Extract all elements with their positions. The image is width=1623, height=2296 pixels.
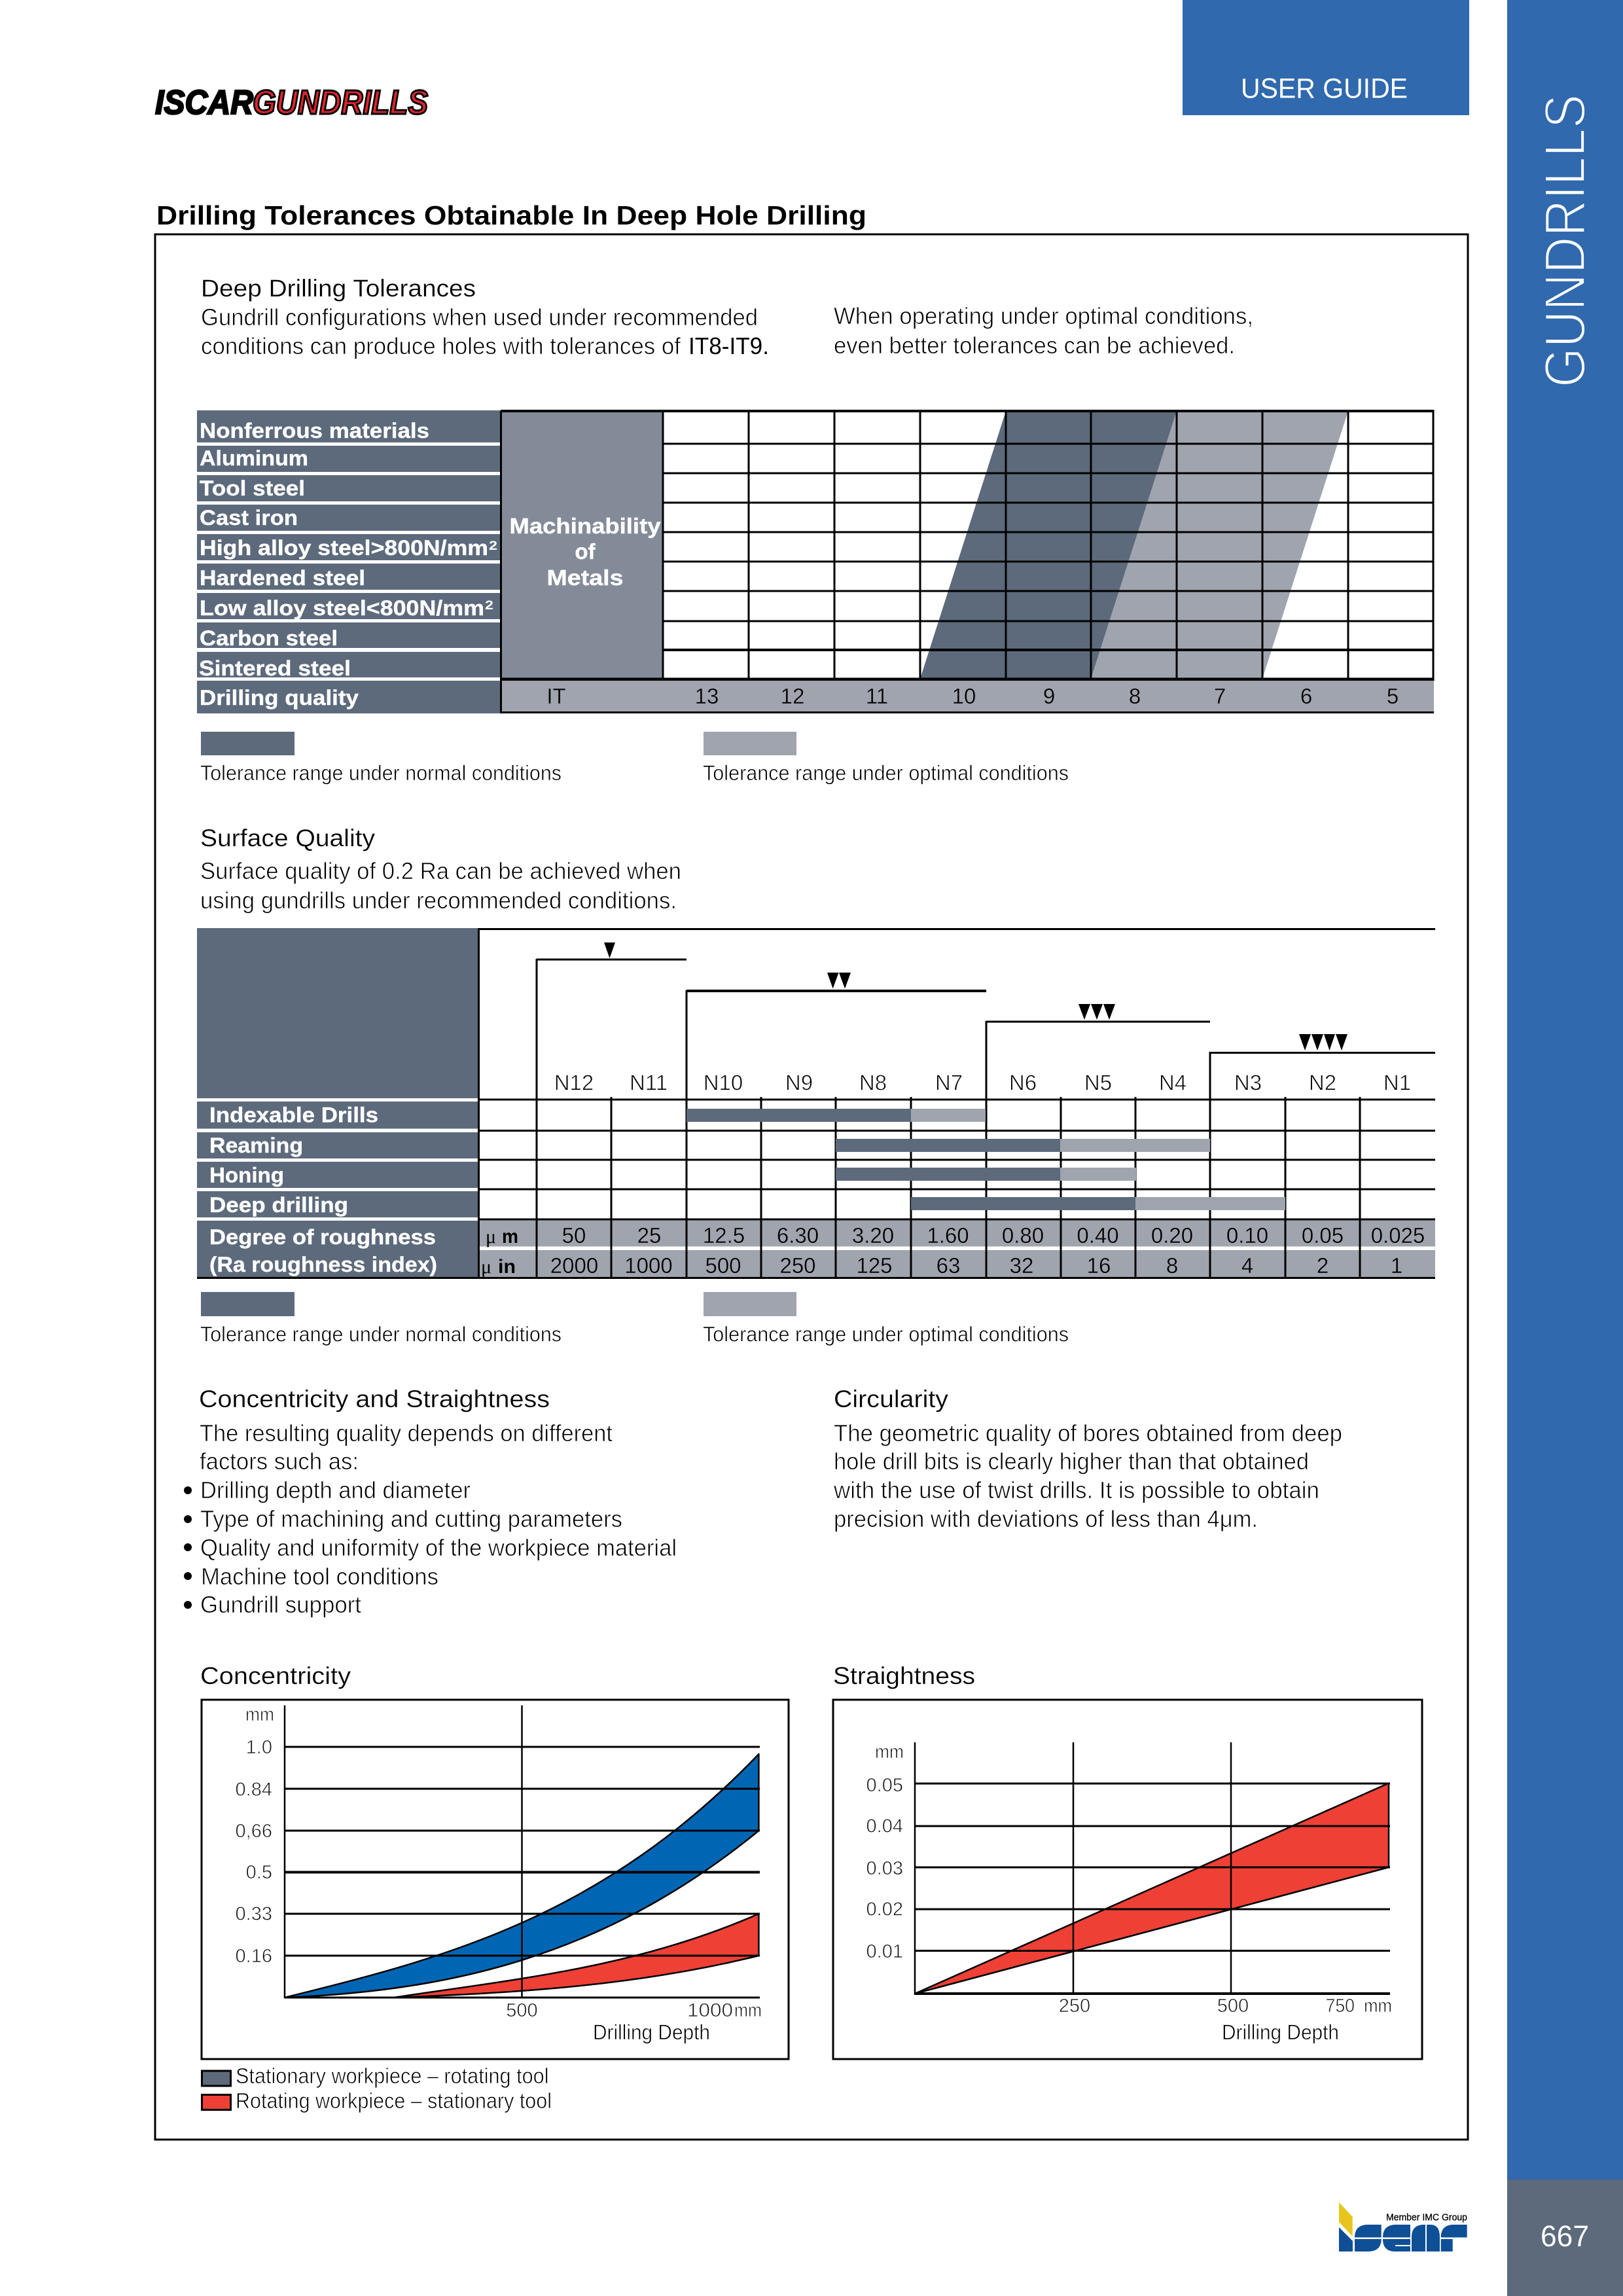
machinability panel: Metals <box>547 565 623 590</box>
roughness value bands <box>480 1220 1435 1277</box>
tolerance band: normal conditions <box>920 411 1177 679</box>
bulleted list of factors: Machine tool conditions <box>201 1563 438 1590</box>
straightness x-axis labels: Drilling Depth <box>1222 2020 1339 2044</box>
roughness grade labels: N3 <box>1234 1071 1262 1094</box>
IT grade row: 6 <box>1300 684 1312 708</box>
roughness values in microinches <box>550 1253 1402 1278</box>
section intro: deep drilling tolerances: Deep Drilling Tolerances <box>201 275 476 302</box>
section intro: surface quality: Surface Quality <box>200 825 376 852</box>
chart: concentricity <box>202 1700 789 2059</box>
IT grade row: 11 <box>866 684 888 708</box>
roughness grade labels: N4 <box>1159 1071 1186 1094</box>
concentricity x-axis labels: Drilling Depth <box>593 2020 710 2044</box>
chart: straightness <box>833 1700 1422 2059</box>
roughness values in micrometres: 0.025 <box>1371 1223 1425 1247</box>
roughness values in micrometres: 3.20 <box>852 1223 894 1247</box>
roughness values in microinches: 1000 <box>624 1253 673 1278</box>
icon: quadruple triangle surface mark <box>1299 1034 1347 1050</box>
legend: tolerance table: Tolerance range under normal conditions <box>200 761 562 785</box>
roughness values in microinches: 2 <box>1317 1253 1329 1278</box>
section intro: surface quality: using gundrills under recommended conditions. <box>200 887 677 914</box>
process label bands: (Ra roughness index) <box>209 1253 437 1276</box>
heading: straightness chart: Straightness <box>833 1662 975 1689</box>
roughness grade labels: N5 <box>1084 1071 1112 1094</box>
IT grade row: 12 <box>781 684 804 708</box>
IT grade row: IT <box>546 684 566 708</box>
icon: double triangle surface mark <box>827 973 851 988</box>
roughness grade labels: N2 <box>1309 1071 1336 1094</box>
logo: Iscar member IMC group: Member IMC Group <box>1386 2212 1467 2223</box>
concentricity y-axis labels: 0.16 <box>236 1946 272 1967</box>
header tab: user guide <box>1183 0 1469 115</box>
straightness y-axis labels: 0.04 <box>866 1816 903 1837</box>
bulleted list of factors: Drilling depth and diameter <box>200 1477 471 1503</box>
straightness x-axis labels: mm <box>1364 1996 1392 2017</box>
IT grade row: 7 <box>1214 684 1226 708</box>
table: machinability of metals by IT grade <box>197 410 1435 713</box>
page title: Drilling Tolerances Obtainable In Deep Hole Drilling <box>156 200 866 230</box>
text block: circularity: precision with deviations of less than 4μm. <box>834 1505 1258 1532</box>
roughness grade labels: N6 <box>1009 1071 1037 1094</box>
material label bands: Nonferrous materials <box>200 419 429 442</box>
straightness x-axis labels: 750 <box>1326 1996 1355 2017</box>
legend: surface quality table: Tolerance range under optimal conditions <box>703 1322 1069 1346</box>
logo: Iscar member IMC group <box>1339 2202 1467 2251</box>
material label bands: High alloy steel>800N/mm <box>200 536 488 560</box>
header tab: user guide: USER GUIDE <box>1241 73 1408 105</box>
roughness values in micrometres: 0.80 <box>1002 1223 1044 1247</box>
machinability panel <box>501 411 664 679</box>
text block: optimal conditions note: When operating under optimal conditions, <box>834 302 1253 329</box>
concentricity y-axis labels: 1.0 <box>246 1737 272 1758</box>
material label bands: Sintered steel <box>199 656 351 680</box>
straightness y-axis labels: 0.05 <box>866 1775 903 1796</box>
process label bands: Honing <box>209 1164 284 1187</box>
straightness y-axis labels <box>866 1742 904 1962</box>
roughness grade labels: N8 <box>859 1071 887 1094</box>
unit labels: μ <box>481 1256 491 1278</box>
roughness values in microinches: 8 <box>1166 1253 1178 1278</box>
text block: circularity <box>833 1386 1342 1532</box>
text block: circularity: Circularity <box>834 1386 949 1412</box>
roughness values in microinches: 63 <box>936 1253 960 1278</box>
main content frame <box>155 234 1468 2140</box>
material label bands: Hardened steel <box>200 566 365 590</box>
roughness values in micrometres: 6.30 <box>777 1223 819 1247</box>
section intro: surface quality <box>200 825 681 914</box>
unit labels: μ <box>486 1226 496 1247</box>
text block: concentricity and straightness <box>184 1386 677 1618</box>
bulleted list of factors <box>184 1477 677 1618</box>
straightness x-axis labels: 500 <box>1217 1996 1249 2017</box>
text block: optimal conditions note: even better tolerances can be achieved. <box>834 332 1235 359</box>
roughness values in micrometres: 0.05 <box>1302 1223 1344 1247</box>
concentricity y-axis labels: 0,66 <box>236 1821 272 1842</box>
IT grade row: 13 <box>695 684 719 708</box>
material label bands: Aluminum <box>200 446 308 470</box>
legend: tolerance table <box>200 732 1069 785</box>
range bars <box>687 1109 1285 1210</box>
roughness values in microinches: 250 <box>779 1253 816 1278</box>
table: surface quality by machining process <box>197 928 1435 1278</box>
roughness values in micrometres: 12.5 <box>703 1223 745 1247</box>
roughness values in micrometres: 50 <box>562 1223 586 1247</box>
concentricity y-axis labels <box>236 1704 274 1967</box>
bulleted list of factors: Type of machining and cutting parameters <box>200 1505 622 1532</box>
text block: concentricity and straightness: factors such as: <box>200 1448 359 1475</box>
roughness grade labels <box>554 1071 1411 1094</box>
band: rotating workpiece, stationary tool <box>394 1914 758 1998</box>
roughness values in micrometres: 25 <box>637 1223 661 1247</box>
text block: circularity: hole drill bits is clearly higher than that obtained <box>834 1448 1309 1475</box>
process label bands: Deep drilling <box>209 1193 348 1217</box>
logo: ISCAR GUNDRILLS: ISCAR <box>155 84 253 122</box>
unit labels: in <box>498 1256 516 1278</box>
icon: yellow insert <box>1339 2202 1353 2236</box>
roughness values in microinches: 32 <box>1010 1253 1033 1278</box>
bulleted list of factors: Quality and uniformity of the workpiece material <box>200 1534 677 1561</box>
icon: single triangle surface mark <box>604 942 615 958</box>
tolerance band: optimal conditions <box>1091 411 1348 679</box>
legend: concentricity chart <box>202 2064 552 2113</box>
material label bands: 2 <box>485 599 493 613</box>
unit labels <box>481 1226 518 1278</box>
roughness grade labels: N11 <box>630 1071 668 1094</box>
concentricity x-axis labels: 1000 <box>687 2000 733 2021</box>
band: stationary workpiece, rotating tool <box>285 1754 758 1998</box>
material label bands: Drilling quality <box>200 686 359 709</box>
roughness values in microinches: 500 <box>705 1253 741 1278</box>
IT grade row: 5 <box>1387 684 1399 708</box>
process label bands: Degree of roughness <box>209 1225 436 1249</box>
roughness values in microinches: 16 <box>1087 1253 1111 1278</box>
process label bands <box>197 1102 478 1278</box>
legend: tolerance table: Tolerance range under optimal conditions <box>703 761 1069 785</box>
text block: circularity: The geometric quality of bores obtained from deep <box>834 1420 1342 1446</box>
straightness x-axis labels: 250 <box>1059 1996 1090 2017</box>
roughness grade labels: N9 <box>785 1071 813 1094</box>
logo: ISCAR GUNDRILLS <box>155 84 428 122</box>
section intro: deep drilling tolerances <box>201 275 769 359</box>
legend: surface quality table <box>200 1292 1069 1346</box>
straightness y-axis labels: mm <box>875 1742 904 1763</box>
roughness values in micrometres: 1.60 <box>927 1223 969 1247</box>
legend: surface quality table: Tolerance range under normal conditions <box>200 1322 562 1346</box>
bulleted list of factors: Gundrill support <box>200 1591 361 1618</box>
straightness x-axis labels <box>1059 1996 1392 2044</box>
roughness values in microinches: 2000 <box>550 1253 598 1278</box>
section intro: deep drilling tolerances: conditions can produce holes with tolerances of <box>201 332 681 359</box>
material label bands <box>197 410 501 713</box>
process label bands: Reaming <box>209 1134 303 1157</box>
page number: 667 <box>1541 2219 1589 2253</box>
section intro: surface quality: Surface quality of 0.2 Ra can be achieved when <box>200 857 681 884</box>
material label bands: Carbon steel <box>200 626 338 650</box>
section intro: deep drilling tolerances: IT8-IT9. <box>688 332 769 359</box>
material label bands: Low alloy steel<800N/mm <box>200 596 484 620</box>
text block: circularity: with the use of twist drills. It is possible to obtain <box>833 1477 1319 1503</box>
concentricity y-axis labels: mm <box>245 1704 274 1725</box>
roughness grade labels: N7 <box>935 1071 963 1094</box>
process label bands: Indexable Drills <box>209 1103 378 1127</box>
roughness grade labels: N10 <box>704 1071 743 1094</box>
text block: concentricity and straightness: Concentricity and Straightness <box>199 1386 550 1412</box>
roughness values in microinches: 125 <box>856 1253 893 1278</box>
IT grade row <box>501 681 1434 713</box>
concentricity y-axis labels: 0.84 <box>236 1779 272 1800</box>
section intro: deep drilling tolerances: Gundrill configurations when used under recommended <box>201 304 758 331</box>
logo wordmark blocks <box>1339 2225 1467 2251</box>
roughness values in microinches: 1 <box>1391 1253 1402 1278</box>
unit labels: m <box>502 1226 518 1247</box>
heading: concentricity chart: Concentricity <box>200 1662 351 1689</box>
roughness values in micrometres <box>562 1223 1425 1247</box>
roughness values in micrometres: 0.20 <box>1151 1223 1193 1247</box>
logo: ISCAR GUNDRILLS: GUNDRILLS <box>253 84 428 122</box>
header block <box>197 928 478 1098</box>
sidebar: blue strip with section name and page number <box>1507 0 1623 2296</box>
text block: concentricity and straightness: The resulting quality depends on different <box>200 1420 613 1446</box>
text block: optimal conditions note <box>834 302 1253 359</box>
band: straightness range <box>915 1783 1389 1994</box>
roughness grade labels: N12 <box>554 1071 594 1094</box>
roughness values in micrometres: 0.10 <box>1226 1223 1268 1247</box>
roughness values in micrometres: 0.40 <box>1077 1223 1119 1247</box>
grid and bracket lines <box>197 928 1435 1278</box>
straightness y-axis labels: 0.03 <box>866 1858 903 1879</box>
icon: triple triangle surface mark <box>1079 1004 1115 1020</box>
concentricity y-axis labels: 0.33 <box>236 1903 272 1924</box>
legend: concentricity chart: Rotating workpiece – stationary tool <box>236 2089 552 2113</box>
sidebar label: GUNDRILLS: GUNDRILLS <box>1533 94 1597 387</box>
legend: concentricity chart: Stationary workpiece – rotating tool <box>236 2064 548 2088</box>
concentricity x-axis labels: mm <box>734 2000 762 2021</box>
roughness grade labels: N1 <box>1383 1071 1411 1094</box>
concentricity x-axis labels <box>506 2000 762 2044</box>
concentricity y-axis labels: 0.5 <box>246 1862 272 1883</box>
machinability panel: of <box>575 539 596 564</box>
material label bands: Tool steel <box>200 476 305 500</box>
concentricity x-axis labels: 500 <box>506 2000 538 2021</box>
roughness values in microinches: 4 <box>1241 1253 1253 1278</box>
material label bands: 2 <box>489 539 497 553</box>
straightness y-axis labels: 0.02 <box>866 1899 903 1920</box>
IT grade row: 9 <box>1043 684 1055 708</box>
straightness y-axis labels: 0.01 <box>866 1941 903 1962</box>
IT grade row: 8 <box>1129 684 1141 708</box>
IT grade row: 10 <box>952 684 976 708</box>
machinability panel: Machinability <box>509 514 661 538</box>
material label bands: Cast iron <box>200 506 298 529</box>
